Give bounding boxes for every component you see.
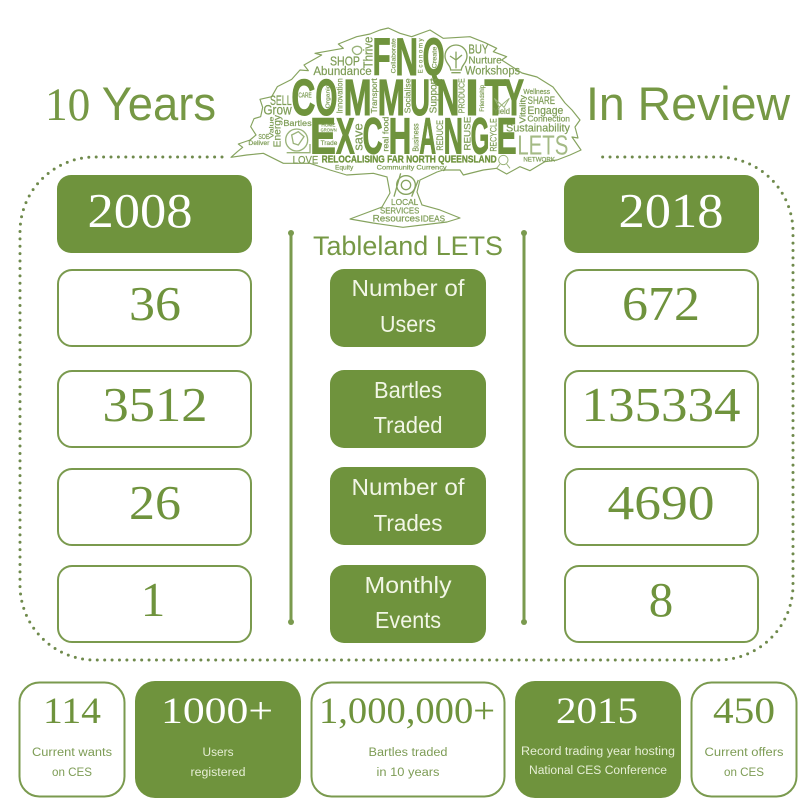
- word cloud: Yield: [493, 107, 510, 116]
- word cloud: Sustainability: [506, 123, 570, 135]
- word cloud: SERVICES: [380, 205, 420, 215]
- stat: 1,000,000+ bartles traded: in 10 years: [376, 767, 440, 779]
- title word: EXCHANGE: [310, 107, 517, 164]
- value: trades 4690: 4690: [608, 475, 714, 530]
- value: bartles 3512: 3512: [102, 377, 208, 432]
- heading: In Review: In Review: [586, 77, 791, 130]
- word cloud: Engage: [527, 105, 563, 117]
- stat: 114 current wants: 114: [43, 691, 101, 732]
- year header 2018: 2018: [618, 183, 724, 238]
- title word: COMMUNITY: Y: [504, 69, 524, 126]
- title word: COMMUNITY: O: [315, 69, 337, 126]
- icon: globe: [286, 129, 310, 153]
- word cloud: Workshops: [465, 63, 520, 77]
- stat: 114 current wants: on CES: [52, 767, 92, 779]
- label: Monthly Events: [330, 565, 486, 643]
- label: Bartles Traded: Traded: [374, 412, 442, 438]
- panel: 2018 column: [564, 175, 759, 642]
- value: bartles 135334: 135334: [582, 377, 740, 432]
- year header 2008: [57, 175, 252, 253]
- stat: 1000+ users registered: Users: [202, 747, 234, 759]
- word cloud: Transport: [369, 78, 379, 113]
- word cloud: Innovation: [335, 78, 345, 113]
- word cloud: SHARE: [528, 95, 555, 107]
- stat: 2015 record trading year: National CES Conference: [529, 765, 667, 777]
- word cloud: NETWORK: [523, 157, 556, 164]
- value: users 36: 36: [129, 276, 181, 331]
- icon: ribbon badge: [497, 155, 510, 168]
- stat: 450 current offers: 450: [713, 691, 775, 732]
- value: users 672: 672: [622, 276, 700, 331]
- label: Number of Trades: [330, 467, 486, 545]
- word cloud: Nurture: [468, 55, 502, 66]
- word cloud: Business: [412, 123, 421, 152]
- word cloud: CARE: [298, 90, 312, 99]
- word cloud: Energy: [273, 115, 284, 147]
- stat: 1000+ users registered: 1000+: [161, 691, 273, 732]
- label: Number of Users: [330, 269, 486, 347]
- label: Monthly Events: Events: [375, 607, 441, 633]
- title word: EXCHANGE: A: [419, 107, 436, 164]
- word cloud: RECYCLE: [488, 118, 498, 152]
- stat: 114 current wants: Current wants: [32, 747, 112, 759]
- divider line: left: [288, 230, 294, 625]
- word cloud: Resources: [373, 213, 420, 223]
- stat: 2015 record trading year: 2015: [556, 691, 638, 732]
- label: Bartles Traded: Bartles: [374, 377, 442, 403]
- word cloud: IDEAS: [421, 214, 445, 223]
- word cloud: Friendship: [480, 84, 486, 112]
- label: Number of Trades: Number of: [352, 474, 465, 500]
- title word: COMMUNITY: C: [291, 69, 315, 126]
- title word: COMMUNITY: M: [378, 69, 405, 126]
- value: events 8: 8: [649, 572, 673, 627]
- word cloud: REDUCE: [435, 120, 445, 151]
- word cloud: Wellness: [523, 87, 550, 96]
- word cloud: Grow: [263, 101, 292, 117]
- word cloud: Organic: [325, 85, 331, 108]
- word cloud: Equity: [335, 164, 354, 171]
- word cloud: SELL: [270, 92, 292, 108]
- stat: 450 current offers: on CES: [724, 767, 764, 779]
- title word: FNQ: F: [373, 28, 391, 87]
- title word: EXCHANGE: N: [444, 107, 463, 164]
- year header 2018: [564, 175, 759, 253]
- word cloud: Value: [270, 116, 276, 138]
- value: bartles 135334: [565, 371, 758, 447]
- word cloud: PRODUCE: [457, 78, 467, 113]
- stat: 1,000,000+ bartles traded: Bartles traded: [368, 747, 448, 759]
- divider line: right: [521, 230, 527, 625]
- value: events 1: [58, 566, 251, 642]
- title word: COMMUNITY: T: [484, 69, 506, 126]
- title word: EXCHANGE: G: [471, 107, 489, 164]
- year header 2008: 2008: [88, 183, 192, 238]
- word cloud: Connection: [527, 114, 570, 124]
- stat: 1,000,000+ bartles traded: [312, 682, 504, 796]
- title word: EXCHANGE: H: [389, 107, 411, 164]
- title word: FNQ: N: [395, 28, 418, 87]
- word cloud: Collaborate: [391, 38, 398, 73]
- stat: 450 current offers: [692, 682, 796, 796]
- icon: plate and cutlery on trunk: [394, 173, 418, 197]
- word cloud: SHOP: [330, 54, 360, 69]
- word cloud: Economy: [419, 38, 425, 73]
- stat: 1000+ users registered: registered: [190, 767, 246, 779]
- title word: COMMUNITY: M: [344, 69, 372, 126]
- word cloud: Create: [432, 46, 439, 68]
- value: users 36: [58, 270, 251, 346]
- icon: butterfly: [494, 98, 509, 107]
- value: events 1: 1: [141, 572, 165, 627]
- value: trades 26: 26: [129, 475, 181, 530]
- label: Number of Trades: Trades: [374, 510, 442, 536]
- value: trades 26: [58, 469, 251, 545]
- word cloud: LOCAL: [391, 197, 419, 207]
- icon: light bulb: [445, 45, 467, 73]
- word cloud: [248, 37, 570, 223]
- label: Number of Users: Users: [380, 311, 436, 337]
- stat: 1000+ users registered: [135, 681, 301, 798]
- title word: FNQ: Q: [423, 28, 445, 87]
- title word: FNQ: [373, 28, 445, 87]
- word cloud: GROWN: [321, 128, 337, 134]
- title word: COMMUNITY: N: [437, 69, 459, 126]
- word cloud: Vitality: [518, 95, 527, 123]
- word cloud: Socialise: [402, 78, 412, 113]
- label: Monthly Events: Monthly: [364, 572, 452, 598]
- stat: 2015 record trading year: Record trading year hosting: [521, 746, 675, 758]
- word cloud: SOE: [258, 132, 269, 141]
- title word: EXCHANGE: X: [336, 107, 355, 164]
- panel: metric labels: [330, 269, 486, 643]
- logo: FNQ Community Exchange tree: [231, 28, 581, 227]
- word cloud: LOVE: [293, 154, 318, 166]
- title word: COMMUNITY: I: [465, 69, 479, 126]
- heading: Tableland LETS: Tableland LETS: [313, 231, 503, 261]
- stat: 1,000,000+ bartles traded: 1,000,000+: [319, 691, 495, 732]
- value: trades 4690: [565, 469, 758, 545]
- word cloud: REUSE: [462, 117, 472, 151]
- title word: EXCHANGE: E: [497, 107, 517, 164]
- tagline: RELOCALISING FAR NORTH QUEENSLAND: [322, 155, 497, 166]
- word cloud: Trade: [321, 140, 338, 147]
- word cloud: LETS: [517, 129, 568, 160]
- tree outline: [231, 28, 581, 227]
- word cloud: HOME: [321, 123, 336, 129]
- label: Bartles Traded: [330, 370, 486, 448]
- stat: 450 current offers: Current offers: [704, 747, 784, 759]
- word cloud: Thrive: [362, 37, 376, 68]
- word cloud: BUY: [468, 41, 488, 56]
- word cloud: save: [352, 123, 366, 151]
- panel: 2008 column: [57, 175, 252, 642]
- word cloud: real food: [381, 116, 391, 152]
- title word: EXCHANGE: C: [363, 107, 383, 164]
- word cloud: Support: [429, 78, 440, 113]
- word cloud: Community Currency: [377, 164, 447, 171]
- value: users 672: [565, 270, 758, 346]
- title word: EXCHANGE: E: [310, 107, 336, 164]
- stat: 2015 record trading year: [515, 681, 681, 798]
- label: Number of Users: Number of: [352, 275, 465, 301]
- icon: apple: [352, 46, 362, 54]
- title word: COMMUNITY: [291, 69, 524, 126]
- word cloud: Deliver: [248, 140, 270, 147]
- value: bartles 3512: [58, 371, 251, 447]
- value: events 8: [565, 566, 758, 642]
- word cloud: Abundance: [313, 64, 372, 78]
- word cloud: Bartles: [283, 118, 312, 128]
- dotted frame: [20, 157, 793, 660]
- title word: COMMUNITY: U: [410, 69, 430, 126]
- stat: 114 current wants: [20, 682, 124, 796]
- heading: 10 Years: 10 Years: [45, 77, 216, 131]
